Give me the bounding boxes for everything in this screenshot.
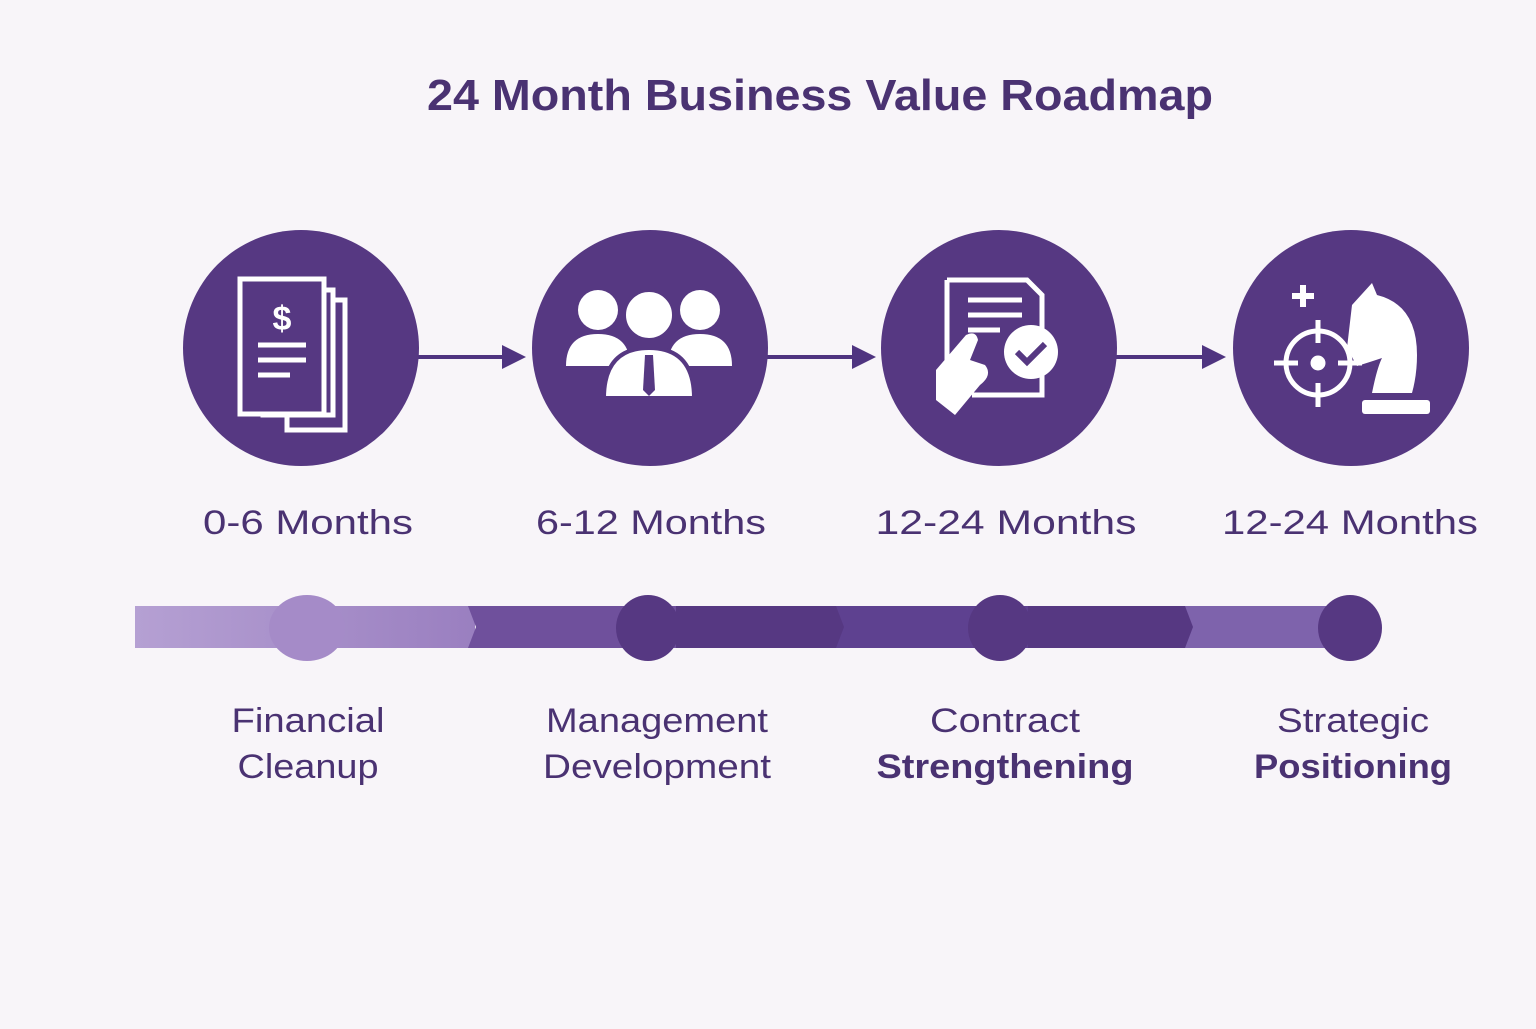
phase labels: Cleanup [238, 748, 378, 786]
arrow: 3 to 4 [1116, 345, 1226, 369]
title: 24 Month Business Value Roadmap [427, 71, 1213, 120]
milestone dots [269, 595, 345, 661]
period labels [203, 504, 1478, 542]
phase labels: Financial [232, 702, 384, 740]
arrow: 1 to 2 [418, 345, 526, 369]
phase labels: Strategic [1277, 702, 1429, 740]
period labels: 0-6 Months [203, 504, 413, 542]
phase labels: Management [546, 702, 769, 740]
phase labels: Contract [930, 702, 1081, 740]
arrow: 2 to 3 [767, 345, 876, 369]
period labels: 6-12 Months [536, 504, 766, 542]
period labels: 12-24 Months [1222, 504, 1478, 542]
icon circle: financial documents: $ [273, 300, 292, 338]
icon circle: strategy [1233, 230, 1469, 466]
icon circle: financial documents [183, 230, 419, 466]
period labels: 12-24 Months [876, 504, 1136, 542]
icon circle: team [532, 230, 768, 466]
phase labels [232, 702, 1452, 786]
icon circle: contract [881, 230, 1117, 466]
phase labels: Development [543, 748, 772, 786]
phase labels: Strengthening [876, 748, 1134, 786]
phase labels: Positioning [1254, 748, 1452, 786]
timeline bar [135, 595, 1382, 661]
